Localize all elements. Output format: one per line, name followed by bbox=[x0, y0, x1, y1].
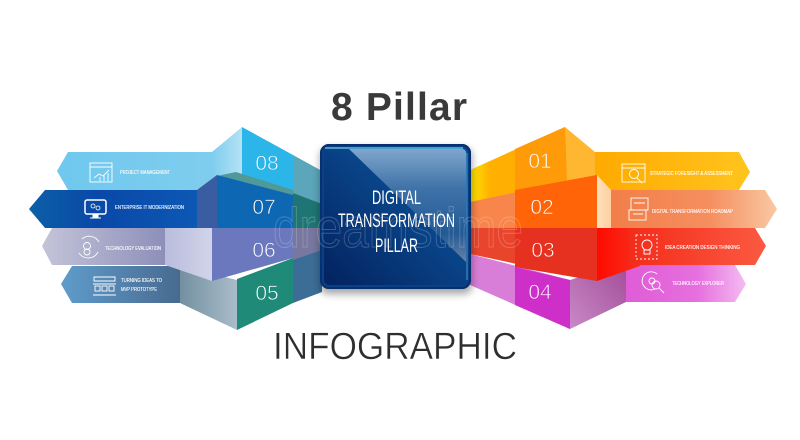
number 07: 07 bbox=[252, 196, 276, 219]
pillar 07 bbox=[29, 175, 322, 228]
label: idea creation design thinking: IDEA CREATION DESIGN THINKING bbox=[665, 245, 740, 251]
heading line: digital: DIGITAL bbox=[372, 188, 421, 209]
icon: roadmap document bbox=[629, 198, 648, 220]
icon: technology explorer bbox=[642, 272, 664, 293]
pillar 01 bbox=[470, 127, 750, 204]
label: enterprise it modernization: ENTERPRISE IT MODERNIZATION bbox=[115, 205, 184, 211]
pillar 06 bbox=[42, 226, 322, 281]
icon: monitor bbox=[85, 200, 106, 218]
number 05: 05 bbox=[255, 282, 279, 305]
label: digital transformation roadmap: DIGITAL TRANSFORMATION ROADMAP bbox=[652, 209, 733, 215]
watermark: dreamstime bbox=[273, 196, 523, 259]
pillar 03 bbox=[470, 228, 766, 281]
number 03: 03 bbox=[531, 239, 555, 262]
label: strategic foresight & assessment: STRATEGIC FORESIGHT & ASSESSMENT bbox=[650, 171, 733, 177]
heading line: transformation: TRANSFORMATION bbox=[338, 211, 455, 232]
icon: prototype bbox=[93, 277, 116, 295]
pillar 08 bbox=[57, 127, 322, 206]
pillar 05 bbox=[61, 248, 322, 330]
number 08: 08 bbox=[255, 152, 279, 175]
icon: light bulb bbox=[636, 235, 657, 259]
icon: strategic foresight bbox=[622, 164, 645, 183]
heading line: pillar: PILLAR bbox=[375, 236, 418, 257]
pillar 04 bbox=[470, 254, 746, 329]
number 01: 01 bbox=[528, 150, 552, 173]
number 04: 04 bbox=[528, 281, 552, 304]
title: 8 Pillar: 8 Pillar bbox=[331, 86, 467, 129]
number 06: 06 bbox=[252, 239, 276, 262]
subtitle: infographic: INFOGRAPHIC bbox=[273, 326, 517, 368]
icon: evaluation cycle bbox=[79, 236, 99, 258]
label: technology evaluation: TECHNOLOGY EVALUATION bbox=[105, 246, 161, 252]
label: turning ideas to mvp prototype: TURNING IDEAS TO bbox=[121, 278, 162, 284]
label: project management: PROJECT MANAGEMENT bbox=[120, 170, 170, 176]
label: technology explorer: TECHNOLOGY EXPLORER bbox=[672, 281, 724, 287]
icon: chart bbox=[90, 163, 112, 182]
center panel: digital transformation pillar bbox=[320, 144, 472, 294]
label line 2: MVP PROTOTYPE bbox=[121, 287, 157, 293]
number 02: 02 bbox=[530, 196, 554, 219]
pillar 02 bbox=[470, 175, 777, 228]
